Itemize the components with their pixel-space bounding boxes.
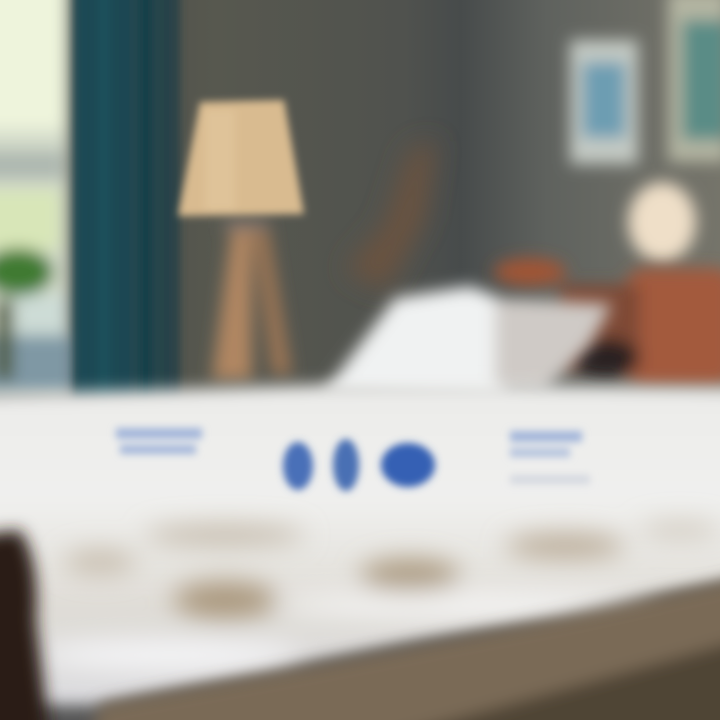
orange cushions	[494, 258, 720, 386]
lamp shade	[178, 100, 304, 216]
bed sheet	[0, 385, 720, 705]
faint blue text patch, left	[116, 428, 202, 454]
white pillow	[322, 286, 612, 400]
brown wall decoration	[345, 140, 436, 290]
lamp legs	[212, 218, 292, 380]
faint blue text patch, right	[510, 431, 590, 484]
dark foreground post	[0, 530, 50, 720]
bedside lamp	[628, 182, 696, 262]
wall picture, centre right	[570, 40, 638, 164]
window with foliage	[0, 0, 75, 400]
sheet folds	[40, 522, 720, 669]
blue icons	[283, 439, 435, 491]
bed base	[90, 578, 720, 720]
icon: middle blue mark	[333, 439, 359, 491]
icon: left blue mark	[283, 442, 313, 490]
wall	[0, 0, 720, 400]
wall picture, far right	[668, 0, 720, 162]
icon: right blue mark	[381, 443, 435, 487]
teal curtain	[74, 0, 180, 400]
